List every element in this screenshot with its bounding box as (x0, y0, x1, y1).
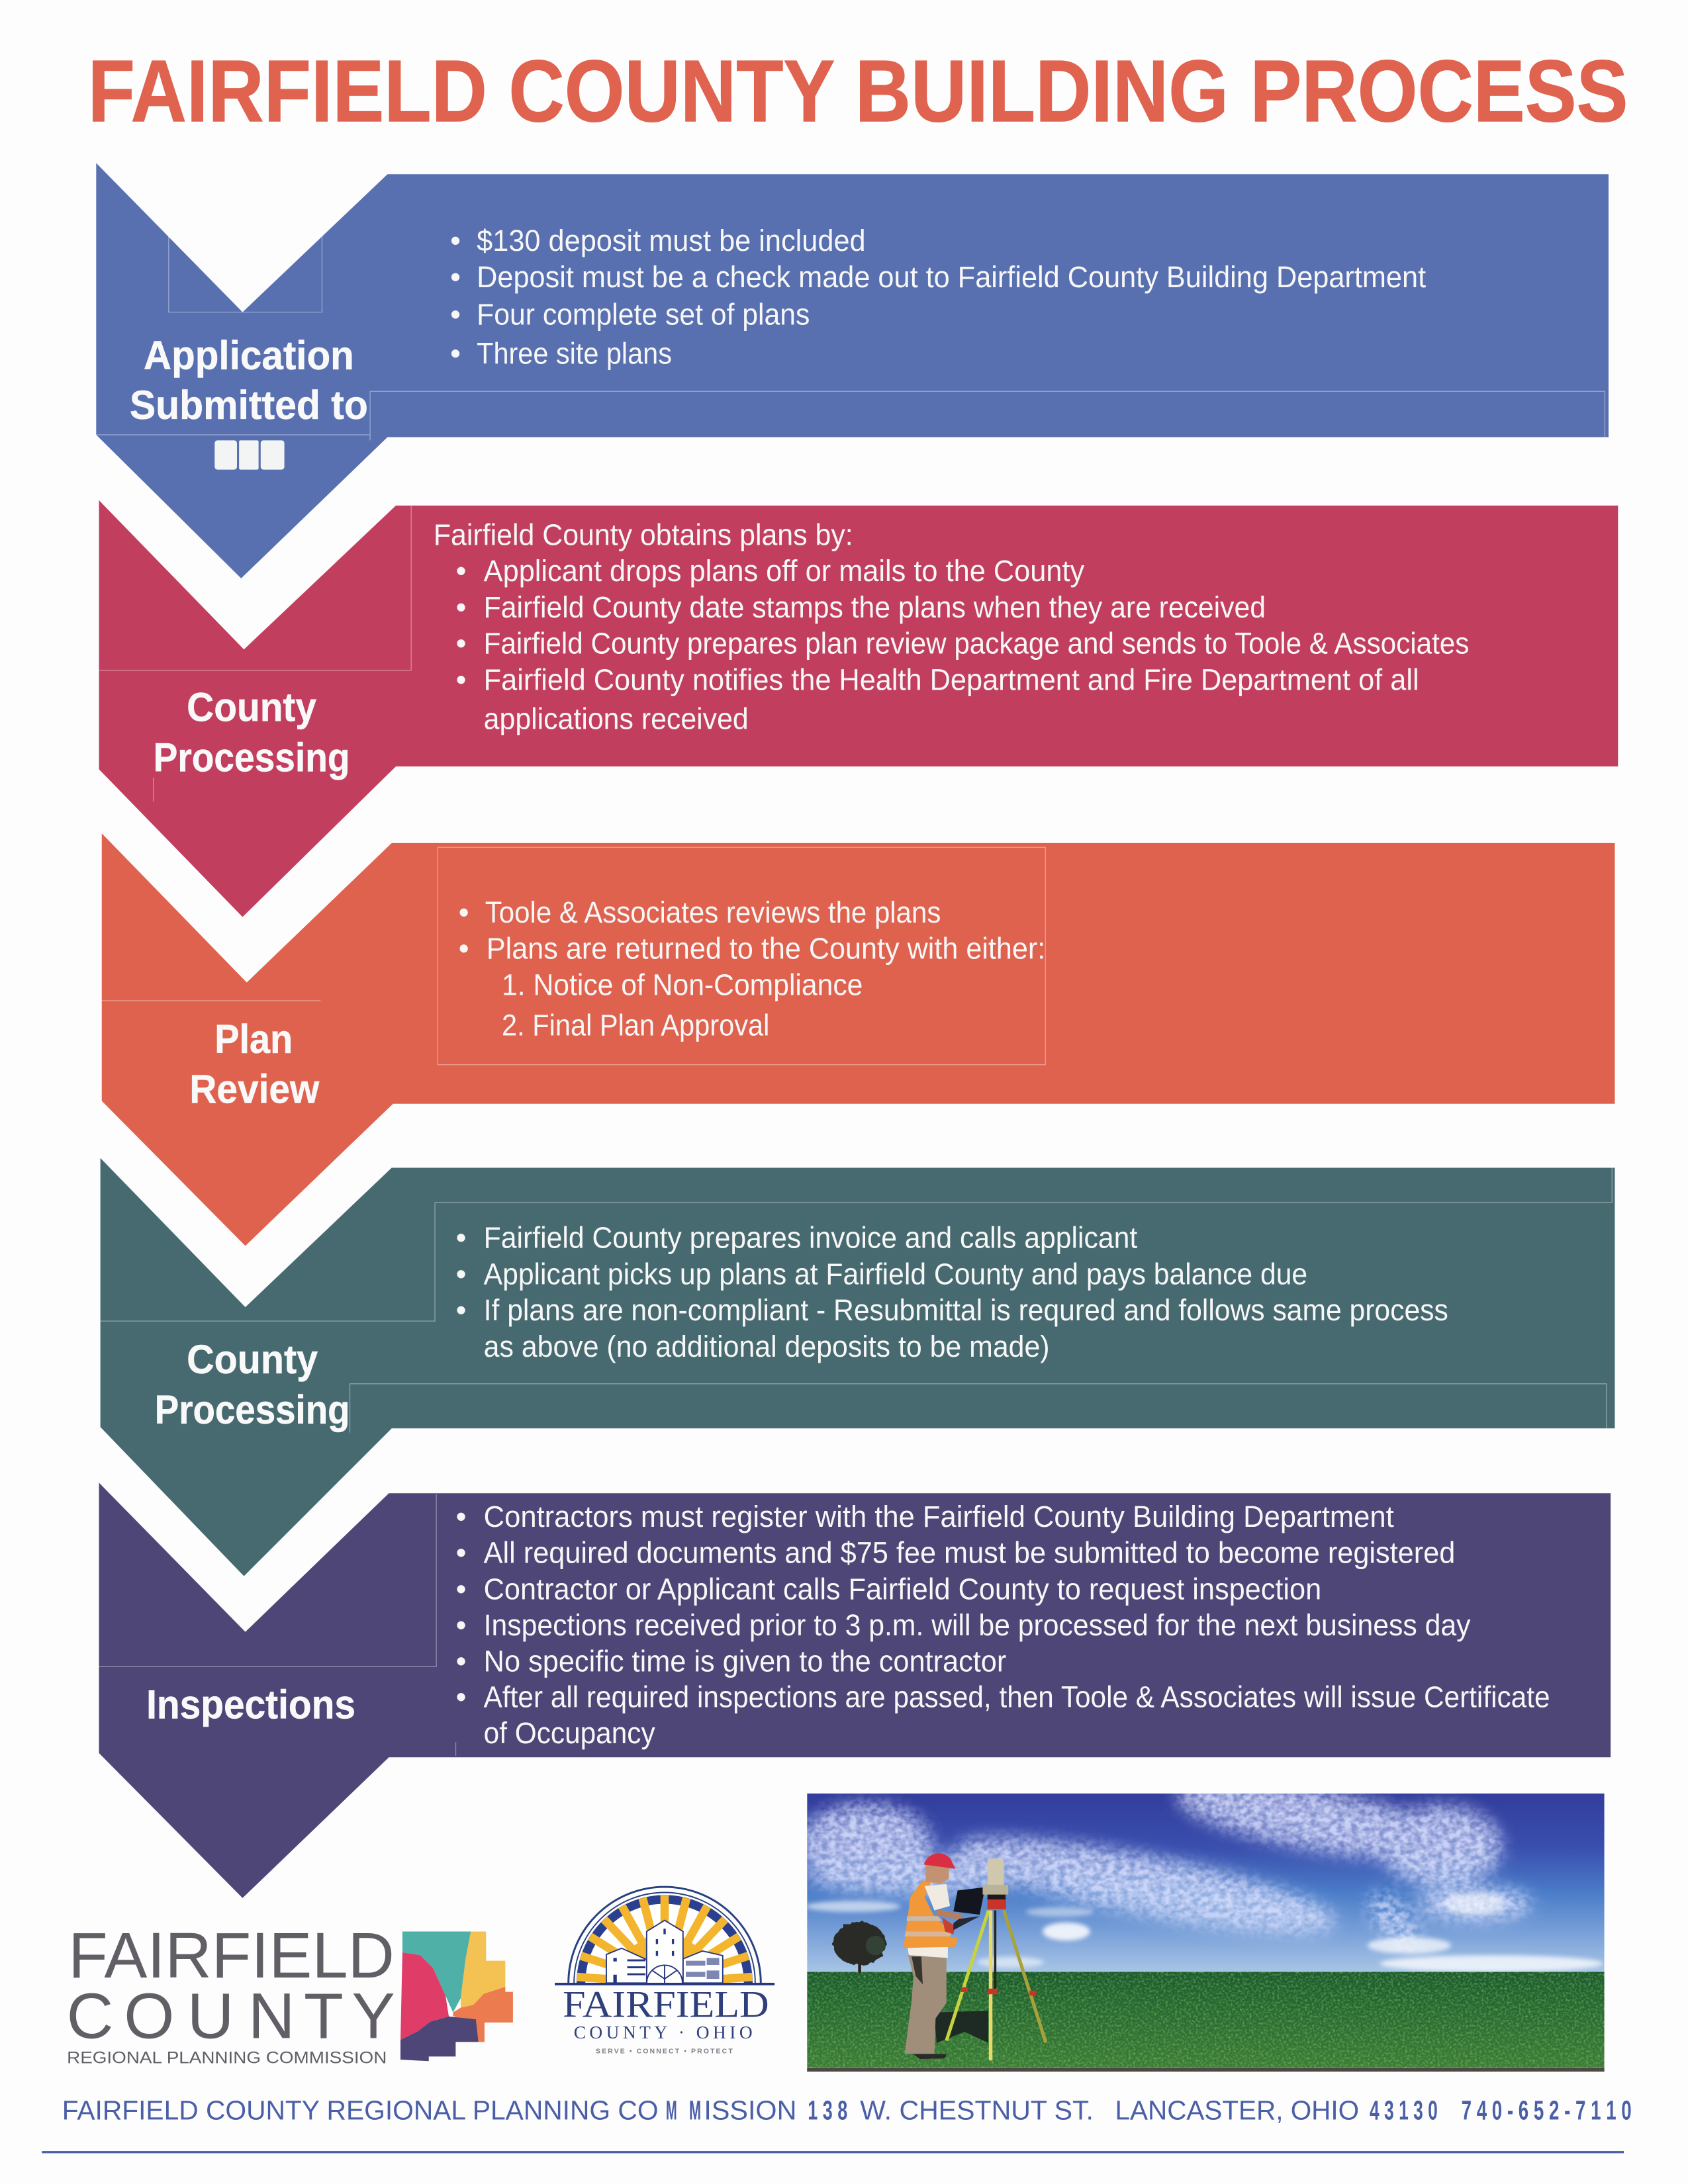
bullets: invoice and pickup (456, 1221, 1448, 1363)
footer contact line: LANCASTER, OHIO (1115, 2095, 1359, 2126)
bullets: how county obtains plans: Applicant drops plans off or mails to the County (484, 554, 1085, 588)
bullets: application requirements: Four complete set of plans (477, 298, 810, 332)
bullets: plan review steps: Toole & Associates reviews the plans (485, 895, 941, 929)
bullets: inspection rules: No specific time is given to the contractor (484, 1645, 1006, 1678)
surveyor (904, 1853, 962, 2059)
bullets: plan review steps: 2. Final Plan Approval (502, 1009, 769, 1042)
bullets: how county obtains plans: • (456, 590, 466, 624)
bullets: how county obtains plans: • (456, 554, 466, 588)
bullets: plan review steps: Plans are returned to the County with either: (487, 932, 1045, 966)
bullets: inspection rules: • (456, 1608, 466, 1642)
footer contact line: 4 3 1 3 0 (1370, 2095, 1438, 2126)
heading: application submitted to (130, 333, 368, 428)
bullets: how county obtains plans: • (456, 662, 466, 696)
heading: plan review: Plan (214, 1017, 293, 1062)
hard hat (924, 1853, 955, 1869)
blue band (581, 1899, 748, 1983)
outlines: plan review (102, 847, 1045, 1065)
bullets: how county obtains plans: • (456, 627, 466, 660)
heading: application submitted to: Submitted to (130, 383, 368, 428)
bullets: application requirements: Three site plans (477, 337, 672, 371)
panel: plan review (102, 833, 1615, 1246)
icon: county map (400, 1931, 513, 2061)
bullets: application requirements: $130 deposit must be included (477, 224, 866, 257)
heading: county processing: Processing (155, 1387, 350, 1432)
clouds: soft low cloud (806, 1892, 1603, 1972)
clouds: soft haze under the speckle (808, 1794, 1536, 1938)
outlines: application (96, 236, 1605, 440)
wordmark: REGIONAL PLANNING COMMISSION (67, 2048, 387, 2067)
arch ring (569, 1887, 761, 1983)
bullets: inspection rules: Contractors must register with the Fairfield County Building Department (484, 1500, 1394, 1533)
bullets: application requirements (450, 224, 1427, 371)
bullets: how county obtains plans (434, 518, 1469, 735)
total station on tripod (947, 1858, 1046, 2060)
shirt sleeve (925, 1884, 950, 1911)
vest (904, 1881, 958, 1948)
logo: Fairfield County Ohio seal (555, 1887, 774, 2056)
bullets: application requirements: • (450, 298, 461, 332)
footer contact line: ISSION (704, 2095, 796, 2126)
footer contact line: W. CHESTNUT ST. (860, 2095, 1094, 2126)
bullets: invoice and pickup: as above (no additional deposits to be made) (484, 1330, 1050, 1363)
bullets: plan review steps: • (459, 895, 469, 929)
bullets: how county obtains plans: Fairfield County date stamps the plans when they are received (484, 590, 1266, 624)
seal text: COUNTY · OHIO (574, 2023, 753, 2042)
bullets: plan review steps: 1. Notice of Non-Compliance (502, 968, 863, 1001)
footer contact line: FAIRFIELD COUNTY REGIONAL PLANNING CO (62, 2095, 659, 2126)
bullets: invoice and pickup: • (456, 1293, 466, 1327)
bullets: inspection rules: Contractor or Applicant calls Fairfield County to request inspection (484, 1572, 1321, 1606)
ground shadow (934, 2011, 988, 2043)
bullets: plan review steps (459, 895, 1045, 1042)
bullets: application requirements: Deposit must be a check made out to Fairfield County Building Department (477, 260, 1427, 294)
sky (807, 1794, 1605, 1974)
bullets: how county obtains plans: Fairfield County notifies the Health Department and Fire Department of all (484, 662, 1419, 696)
bullets: inspection rules: All required documents and $75 fee must be submitted to become registered (484, 1536, 1455, 1570)
bullets: invoice and pickup: • (456, 1257, 466, 1291)
panel: county processing 1 (99, 500, 1618, 917)
wordmark: COUNTY (67, 1979, 395, 2052)
bullets: application requirements: • (450, 224, 461, 257)
laptop (953, 1887, 985, 1930)
footer contact line: 1 3 8 (808, 2095, 847, 2126)
bullets: invoice and pickup: Applicant picks up plans at Fairfield County and pays balance due (484, 1257, 1307, 1291)
chevron: inspections (99, 1482, 1611, 1898)
sun rays (577, 1895, 752, 1980)
bullets: how county obtains plans: applications received (484, 702, 749, 735)
panel: county processing 2 (101, 1158, 1615, 1576)
bullets: inspection rules: Inspections received prior to 3 p.m. will be processed for the next business day (484, 1608, 1471, 1642)
chevron: plan review (102, 833, 1615, 1246)
bullets: invoice and pickup: Fairfield County prepares invoice and calls applicant (484, 1221, 1138, 1255)
bullets: plan review steps: • (459, 932, 469, 966)
outlines: county processing (99, 506, 411, 801)
heading: county processing: County (187, 685, 316, 730)
base rule (555, 1983, 774, 1985)
trousers (905, 1954, 947, 2054)
panel: inspections (99, 1482, 1611, 1898)
heading: county processing: Processing (154, 735, 350, 780)
footer contact line (62, 2095, 1632, 2126)
bullets: inspection rules: • (456, 1500, 466, 1533)
heading: county processing (154, 685, 350, 780)
buildings (606, 1921, 723, 1983)
bullets: inspection rules: • (456, 1572, 466, 1606)
heading: plan review (189, 1017, 320, 1112)
bullets: invoice and pickup: If plans are non-compliant - Resubmittal is requred and follows same process (484, 1293, 1448, 1327)
tree (833, 1922, 886, 1973)
bullets: inspection rules: of Occupancy (484, 1716, 655, 1750)
bullets: application requirements: • (450, 260, 461, 294)
bullets: inspection rules: After all required inspections are passed, then Toole & Associates will issue Certificate (484, 1680, 1550, 1713)
heading: inspections: Inspections (146, 1682, 355, 1727)
outlines: county processing (101, 1168, 1612, 1433)
building windows (614, 1929, 720, 1983)
icon: three white blocks (214, 440, 285, 470)
footer contact line: M (666, 2095, 677, 2126)
wordmark: FAIRFIELD (68, 1919, 395, 1991)
arm (937, 1912, 962, 1917)
chevron: county processing (99, 500, 1618, 917)
chevron: application (96, 163, 1609, 578)
heading: plan review: Review (189, 1067, 320, 1112)
bullets: how county obtains plans: Fairfield County prepares plan review package and sends to Toole & Associates (484, 627, 1469, 660)
heading: county processing (155, 1337, 350, 1432)
sun core (622, 1937, 708, 1983)
seal text: SERVE • CONNECT • PROTECT (596, 2048, 733, 2056)
heading: application submitted to: Application (144, 333, 354, 378)
outlines: inspections (99, 1494, 456, 1756)
head (925, 1864, 949, 1884)
bullets: application requirements: • (450, 337, 461, 371)
clouds: speckled high cloud (807, 1794, 1537, 1946)
footer rule (42, 2151, 1624, 2153)
bullets: inspection rules: • (456, 1536, 466, 1570)
bullets: how county obtains plans: Fairfield County obtains plans by: (434, 518, 853, 551)
chevron: county processing (101, 1158, 1615, 1576)
wordmark (67, 1919, 395, 2067)
panel: application submitted (96, 163, 1609, 578)
logo: Fairfield County Regional Planning Commission (67, 1919, 513, 2067)
bullets: inspection rules: • (456, 1680, 466, 1713)
photo shadow edge (807, 2068, 1605, 2071)
bullets: inspection rules: • (456, 1645, 466, 1678)
seal text: FAIRFIELD (563, 1983, 769, 2025)
seal text (563, 1983, 769, 2056)
white ray field (585, 1904, 744, 1983)
bullets: inspection rules (456, 1500, 1550, 1750)
heading: county processing: County (187, 1337, 318, 1382)
photo: surveyor in field (802, 1768, 1605, 2068)
footer contact line: M (689, 2095, 701, 2126)
bullets: invoice and pickup: • (456, 1221, 466, 1255)
grass (807, 1972, 1605, 2068)
